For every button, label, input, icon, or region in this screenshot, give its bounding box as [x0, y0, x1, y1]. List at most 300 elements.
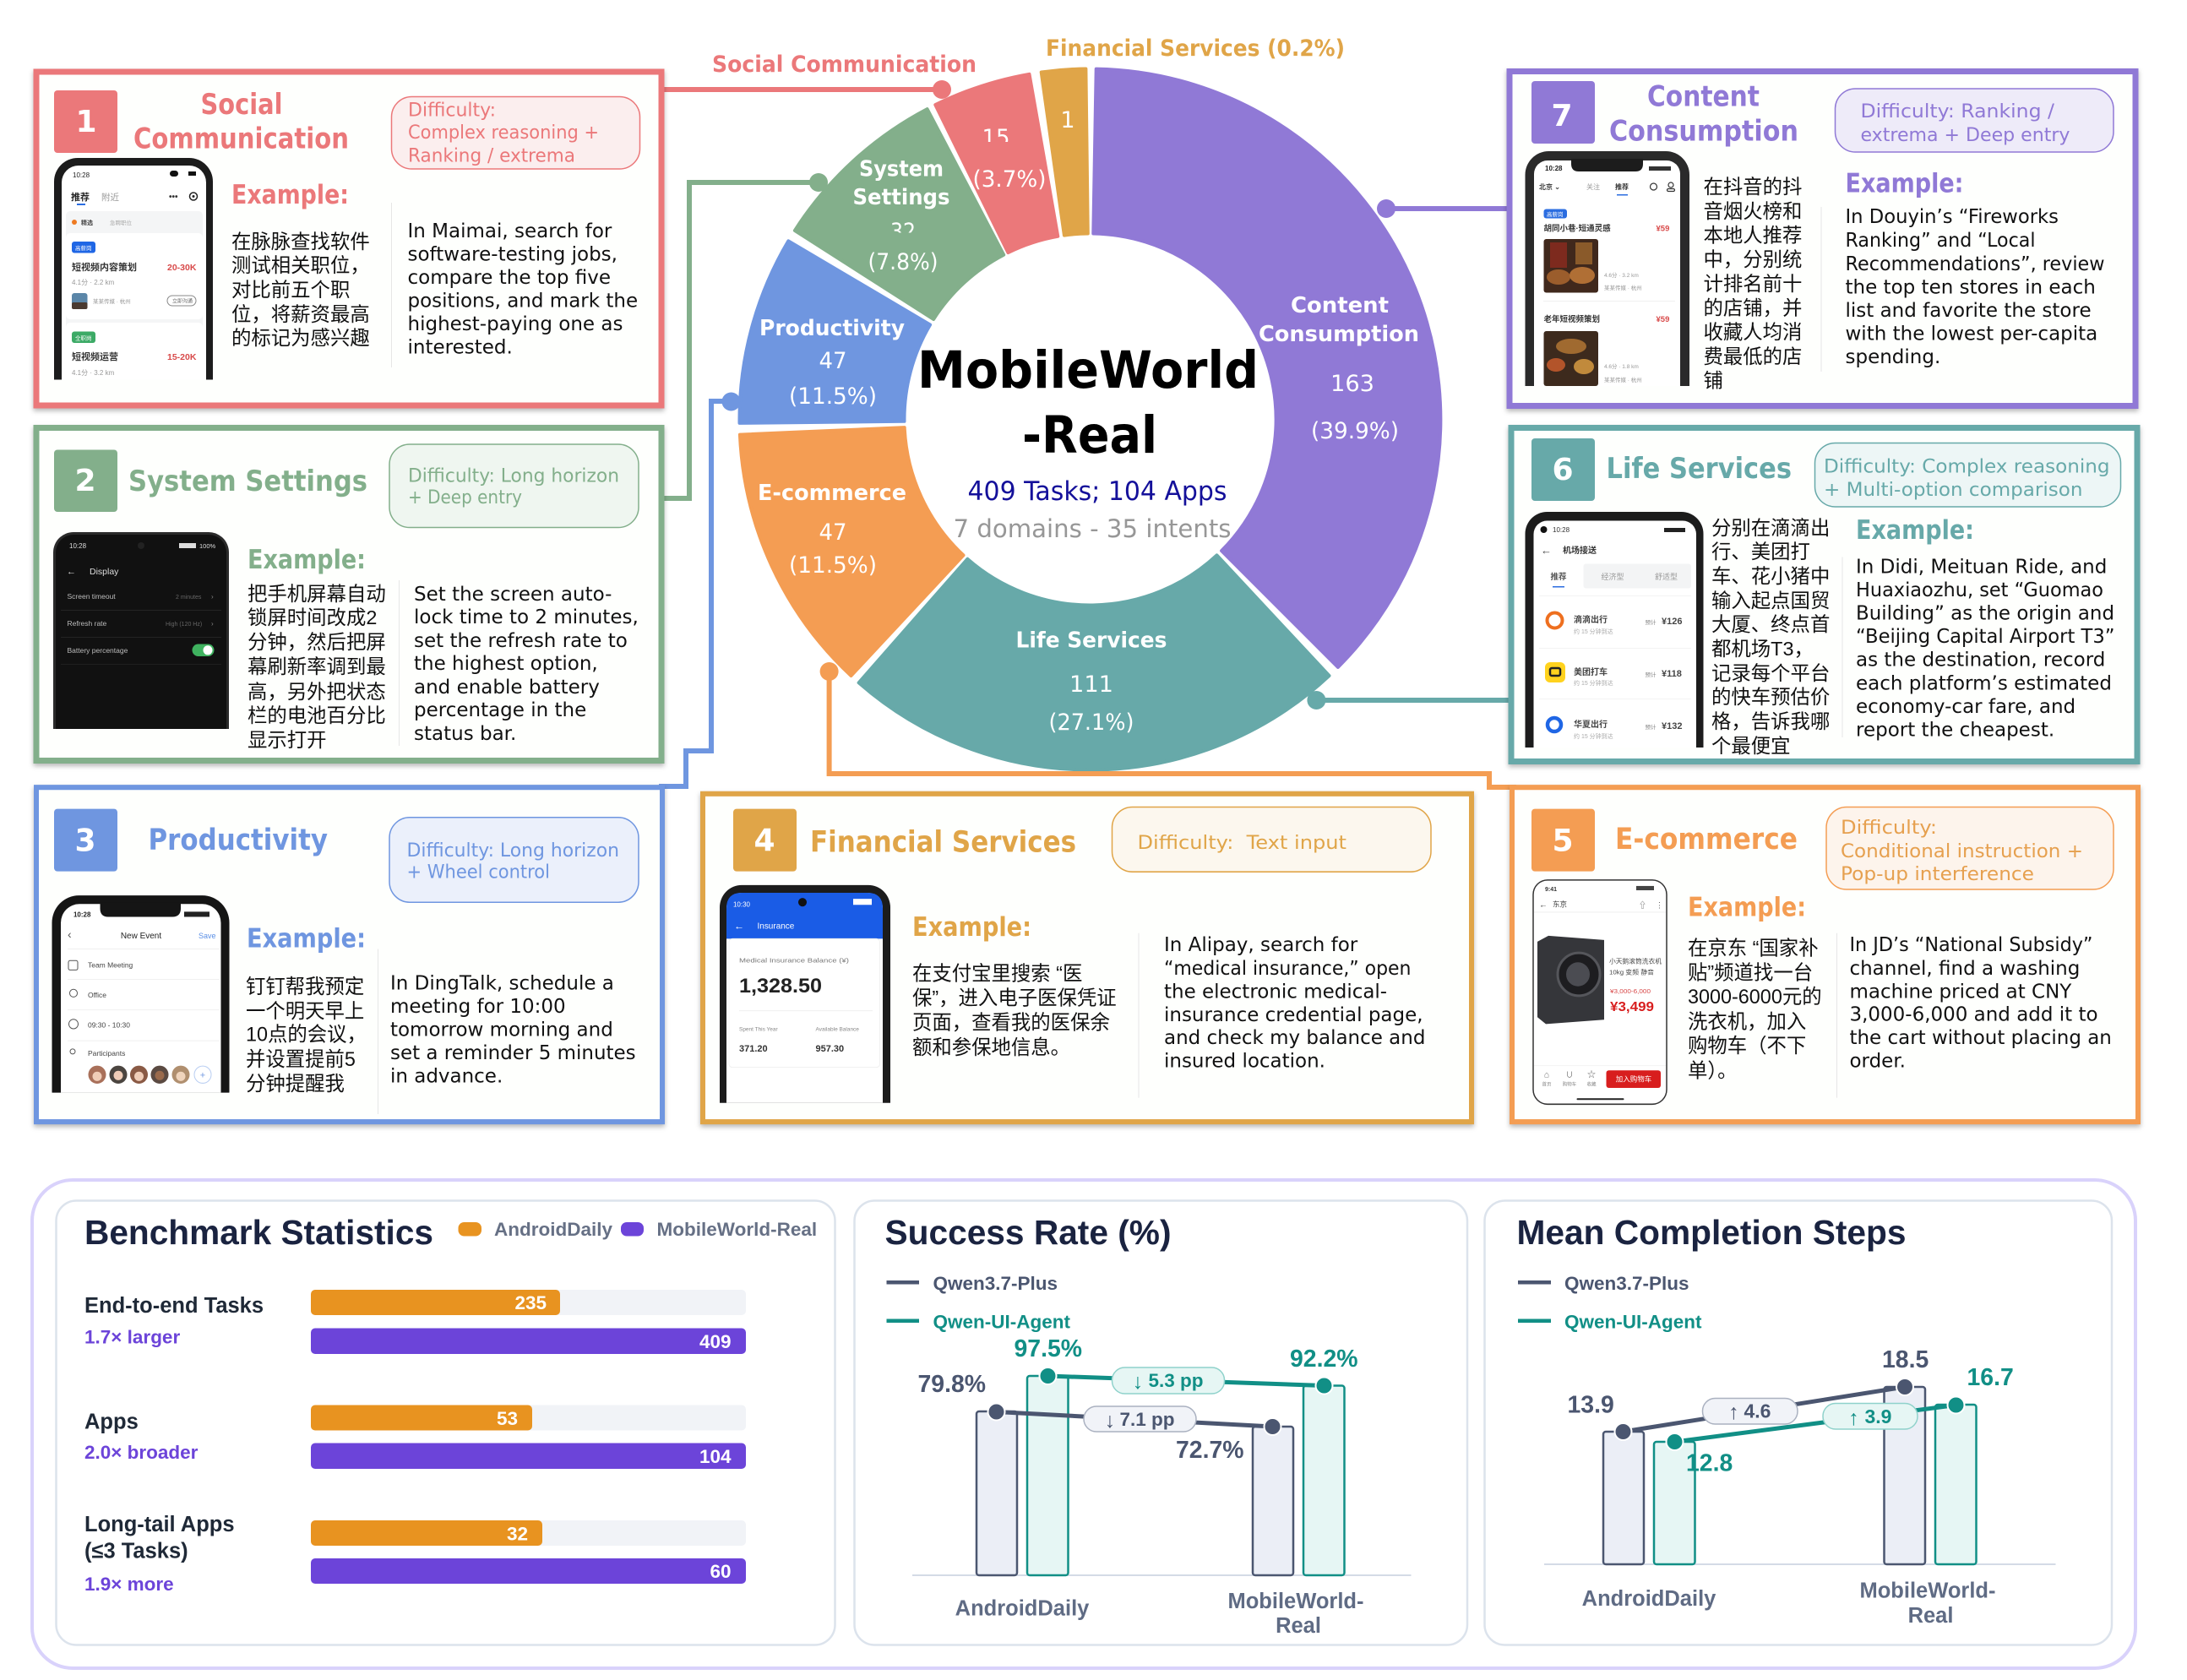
outer label: financial services: Financial Services (0.2%) — [1046, 35, 1345, 62]
number badge 3: 3 — [74, 822, 96, 858]
phone screenshot: display settings: 2 minutes — [176, 595, 202, 601]
phone screenshot: washing machine: ¥3,000-6,000 — [1610, 989, 1651, 995]
phone screenshot: insurance: 10:30 — [733, 900, 751, 908]
center title — [917, 340, 1259, 543]
english task text — [1856, 556, 2115, 742]
phone screenshot: Maimai: ••• — [169, 193, 178, 202]
heading: Productivity — [149, 824, 328, 857]
difficulty pill — [1835, 89, 2114, 152]
phone screenshot: food ranking: 高薪岗 — [1547, 210, 1563, 218]
english task text: meeting for 10:00 — [390, 995, 566, 1018]
metric: end-to-end tasks: 1.7× larger — [84, 1326, 180, 1348]
phone screenshot: washing machine: ← — [1539, 900, 1548, 910]
difficulty pill: + Deep entry — [408, 487, 522, 508]
chinese task text: 行、美团打 — [1711, 541, 1810, 563]
phone screenshot: ride hailing: 约 15 分钟到达 — [1574, 732, 1613, 740]
panel: system settings — [36, 427, 661, 760]
label: financial services: 1 — [1060, 107, 1075, 133]
connector: system settings — [659, 173, 828, 498]
phone screenshot: washing machine: 加入购物车 — [1616, 1074, 1652, 1083]
difficulty pill — [1814, 443, 2120, 507]
chinese task text: 显示打开 — [248, 729, 327, 751]
phone screenshot: Maimai: 高薪岗 — [75, 244, 91, 252]
segment: productivity — [739, 241, 930, 423]
connector: e-commerce — [820, 662, 1516, 787]
metric: apps: 104 — [699, 1446, 732, 1467]
category labels: Real — [1908, 1604, 1953, 1628]
phone screenshot: washing machine: ☆ — [1587, 1069, 1596, 1079]
phone screenshot: ride hailing: 预计 — [1646, 671, 1657, 678]
segment: e-commerce — [740, 427, 963, 676]
phone screenshot: Maimai: 4.1分 · 2.2 km — [72, 279, 115, 286]
phone screenshot: Maimai: 精选 — [81, 219, 93, 226]
phone screenshot: new event: ‹ — [68, 927, 72, 941]
chinese task text: 输入起点国贸 — [1711, 590, 1830, 612]
outer label: social communication: Social Communication — [712, 52, 977, 78]
legend: MobileWorld-Real — [657, 1219, 817, 1240]
chinese task text: 在抖音的抖 — [1703, 176, 1802, 198]
legend — [887, 1273, 1070, 1333]
phone screenshot: Maimai: 某某传媒 · 杭州 — [93, 297, 131, 305]
delta pill: qwen3.7-plus — [1084, 1406, 1196, 1433]
panel: benchmark frame — [32, 1180, 2135, 1668]
phone screenshot: food ranking: ¥59 — [1656, 315, 1669, 324]
chinese task text: 把手机屏幕自动 — [248, 583, 386, 605]
phone screenshot: Maimai: 全职岗 — [75, 334, 91, 341]
delta pill: qwen-ui-agent: ↓ — [1133, 1370, 1143, 1394]
phone screenshot: washing machine: ⇧ — [1639, 900, 1646, 909]
legend — [1518, 1273, 1702, 1333]
phone screenshot: washing machine: 9:41 — [1545, 887, 1557, 893]
phone screenshot: washing machine: 10kg 变频 静音 — [1609, 968, 1654, 976]
label: productivity — [759, 316, 905, 410]
english task text: software-testing jobs, — [407, 243, 617, 265]
phone screenshot: ride hailing: 滴滴出行 — [1574, 614, 1608, 625]
difficulty pill — [389, 444, 639, 527]
phone screenshot: food ranking: 关注 — [1586, 182, 1600, 191]
metric: apps: Apps — [84, 1411, 139, 1434]
card title: Mean Completion Steps — [1517, 1213, 1906, 1252]
phone screenshot: new event: New Event — [121, 932, 161, 941]
chinese task text: 单）。 — [1688, 1059, 1737, 1081]
phone screenshot: Maimai: 短视频内容策划 — [72, 261, 137, 273]
chinese task text: 分钟提醒我 — [246, 1073, 345, 1095]
phone screenshot: insurance: 371.20 — [739, 1044, 768, 1054]
english task text: In DingTalk, schedule a — [390, 971, 614, 994]
center title: 409 Tasks; 104 Apps — [968, 476, 1227, 507]
category labels: MobileWorld- — [1859, 1579, 1996, 1603]
heading: System Settings — [128, 465, 367, 498]
heading — [1609, 79, 1798, 149]
legend: Qwen-UI-Agent — [933, 1311, 1070, 1333]
connector: life services — [1307, 691, 1512, 710]
phone screenshot: ride hailing: ¥132 — [1662, 721, 1682, 731]
number badge 5: 5 — [1552, 822, 1574, 858]
metric: long-tail apps: (≤3 Tasks) — [84, 1539, 188, 1563]
phone screenshot: food ranking: 老年短视频策划 — [1544, 314, 1600, 324]
center title: MobileWorld — [917, 340, 1259, 400]
chinese task text: 本地人推荐 — [1703, 225, 1802, 247]
difficulty pill: Difficulty: Ranking / — [1860, 101, 2055, 122]
chinese task text: 3000-6000元的 — [1688, 986, 1822, 1008]
difficulty pill: + Wheel control — [407, 861, 550, 883]
phone screenshot: new event: 09:30 - 10:30 — [88, 1020, 130, 1029]
number badge 4 — [733, 809, 797, 872]
english task text: insured location. — [1164, 1049, 1325, 1073]
chinese task text: 锁屏时间改成2 — [248, 606, 377, 628]
chinese task text: 分别在滴滴出 — [1711, 517, 1830, 539]
metric: end-to-end tasks: 235 — [514, 1292, 547, 1313]
delta pill: qwen3.7-plus: 7.1 pp — [1120, 1409, 1175, 1430]
center title: 7 domains - 35 intents — [953, 514, 1232, 543]
phone screenshot: display settings — [53, 532, 229, 729]
english task text — [1850, 933, 2112, 1073]
english task text: Set the screen auto- — [414, 584, 612, 606]
phone screenshot: washing machine: 收藏 — [1587, 1080, 1597, 1087]
chinese task text: 幕刷新率调到最 — [248, 655, 386, 677]
phone screenshot: insurance: 1,328.50 — [739, 975, 822, 998]
card: benchmark statistics — [56, 1201, 835, 1645]
phone screenshot: new event: 10:28 — [73, 911, 91, 918]
english task text: Ranking” and “Local — [1845, 230, 2036, 252]
english task text: In Douyin’s “Fireworks — [1845, 206, 2059, 228]
panel: life services — [1511, 427, 2137, 782]
metric: long-tail apps: 1.9× more — [84, 1574, 174, 1595]
phone screenshot: ride hailing: 约 15 分钟到达 — [1574, 628, 1613, 635]
phone screenshot: insurance: Insurance — [757, 922, 795, 932]
chinese task text: 购物车（不下 — [1688, 1035, 1806, 1057]
card title: Success Rate (%) — [885, 1213, 1171, 1252]
phone screenshot: washing machine: 小天鹅滚筒洗衣机 — [1609, 957, 1662, 965]
value labels: 16.7 — [1967, 1364, 2014, 1391]
label: e-commerce: E-commerce — [758, 481, 906, 506]
english task text: status bar. — [414, 723, 516, 745]
english task text: positions, and mark the — [407, 291, 638, 313]
chinese task text: 车、花小猪中 — [1711, 565, 1830, 587]
difficulty pill: Difficulty: Long horizon — [408, 466, 619, 487]
phone screenshot: ride hailing: 预计 — [1646, 618, 1657, 626]
number badge 7: 7 — [1551, 99, 1573, 133]
english task text: the cart without placing an — [1850, 1026, 2112, 1049]
delta pill: qwen-ui-agent — [1112, 1367, 1225, 1394]
phone screenshot: new event: Participants — [88, 1049, 125, 1057]
legend — [458, 1219, 817, 1240]
legend: Qwen-UI-Agent — [1564, 1311, 1702, 1333]
heading: Life Services — [1607, 452, 1792, 486]
difficulty pill: Difficulty: Complex reasoning — [1824, 456, 2110, 478]
heading: Social — [201, 88, 282, 122]
metric: end-to-end tasks: 409 — [699, 1331, 732, 1352]
donut chart — [739, 69, 1440, 769]
metric: apps: 53 — [497, 1408, 518, 1429]
phone screenshot: insurance: ← — [734, 921, 744, 932]
number badge 7 — [1531, 81, 1595, 144]
english task text: insurance credential page, — [1164, 1003, 1423, 1026]
difficulty pill: Complex reasoning + — [408, 122, 599, 144]
phone screenshot: Maimai: 10:28 — [73, 171, 90, 179]
card: mean completion steps — [1485, 1201, 2112, 1645]
example heading: Example: — [248, 545, 366, 575]
chinese task text: 都机场T3， — [1711, 638, 1814, 660]
chinese task text: 位，将薪资最高 — [231, 303, 370, 325]
english task text: channel, find a washing — [1850, 957, 2080, 980]
english task text: In JD’s “National Subsidy” — [1850, 933, 2092, 956]
phone screenshot: display settings: › — [211, 593, 214, 601]
phone screenshot: insurance: Medical Insurance Balance (¥) — [739, 956, 850, 964]
difficulty pill: Difficulty: — [408, 100, 496, 122]
phone screenshot: ride hailing: 10:28 — [1553, 526, 1570, 534]
category labels — [1582, 1579, 1996, 1628]
english task text: spending. — [1845, 346, 1940, 368]
heading: Communication — [133, 122, 349, 155]
donut labels — [758, 107, 1419, 736]
phone screenshot: ride hailing: ¥118 — [1662, 669, 1682, 679]
difficulty pill: + Multi-option comparison — [1824, 480, 2083, 501]
label: e-commerce: 47 — [819, 519, 846, 546]
difficulty pill — [1112, 807, 1431, 872]
segment: system settings — [795, 109, 1004, 319]
english task text: the highest option, — [414, 653, 598, 675]
english task text — [1845, 206, 2105, 368]
label: productivity: 47 — [819, 348, 846, 374]
chinese task text: 在京东 “国家补 — [1688, 938, 1819, 960]
label: content consumption: Consumption — [1259, 322, 1419, 347]
example heading: Example: — [1688, 892, 1806, 923]
english task text: economy-car fare, and — [1856, 696, 2075, 718]
phone screenshot: display settings: ← — [67, 567, 76, 577]
delta pill: qwen3.7-plus: ↑ — [1728, 1400, 1739, 1424]
legend: Qwen3.7-Plus — [933, 1273, 1058, 1294]
label: social communication: 15 — [982, 125, 1010, 151]
label: e-commerce: (11.5%) — [789, 552, 877, 579]
heading: Content — [1647, 79, 1760, 113]
chinese task text: 在支付宝里搜索 “医 — [912, 962, 1082, 985]
label: productivity: Productivity — [759, 316, 905, 341]
number badge 4: 4 — [753, 822, 775, 858]
phone screenshot: ride hailing — [1526, 512, 1703, 748]
difficulty pill: Difficulty: Long horizon — [407, 840, 619, 862]
english task text: tomorrow morning and — [390, 1018, 613, 1041]
phone screenshot: ride hailing: 约 15 分钟到达 — [1574, 679, 1613, 687]
english task text: Building” as the origin and — [1856, 603, 2114, 625]
chinese task text: 一个明天早上 — [246, 1000, 364, 1022]
example heading: Example: — [247, 923, 366, 954]
english task text: and check my balance and — [1164, 1026, 1425, 1049]
heading: Financial Services — [810, 825, 1076, 859]
phone screenshot: Maimai: 急聘职位 — [110, 219, 132, 226]
english task text: highest-paying one as — [407, 313, 623, 335]
delta pill: qwen-ui-agent: 3.9 — [1865, 1405, 1891, 1427]
label: social communication — [975, 128, 1044, 189]
chinese task text: 音烟火榜和 — [1703, 200, 1802, 222]
phone screenshot: ride hailing: 美团打车 — [1574, 666, 1608, 677]
english task text: “Beijing Capital Airport T3” — [1856, 626, 2115, 648]
english task text: In Didi, Meituan Ride, and — [1856, 556, 2107, 578]
phone screenshot: ride hailing: 华夏出行 — [1574, 719, 1608, 730]
phone screenshot: Maimai: 附近 — [101, 192, 119, 203]
panel: e-commerce — [1512, 787, 2138, 1122]
english task text: and enable battery — [414, 677, 600, 699]
chinese task text: 记录每个平台 — [1711, 662, 1830, 684]
phone screenshot: Maimai — [54, 158, 213, 380]
phone screenshot: washing machine: ¥3,499 — [1610, 1000, 1654, 1014]
phone screenshot: washing machine — [1533, 880, 1667, 1104]
english task text: Recommendations”, review — [1845, 253, 2105, 275]
difficulty pill: Conditional instruction + — [1841, 840, 2083, 862]
english task text: lock time to 2 minutes, — [414, 606, 639, 628]
phone screenshot: ride hailing: 预计 — [1646, 723, 1657, 731]
phone screenshot: ride hailing: ¥126 — [1662, 617, 1682, 627]
english task text: order. — [1850, 1049, 1906, 1073]
segment: life services — [859, 555, 1330, 769]
number badge 3 — [54, 809, 117, 872]
category labels: Real — [1276, 1614, 1321, 1638]
example heading: Example: — [1845, 169, 1963, 199]
chinese task text: 大厦、终点首 — [1711, 613, 1830, 635]
chinese task text: 10点的会议， — [246, 1024, 367, 1046]
chinese task text: 个最便宜 — [1711, 735, 1791, 757]
delta pill: qwen3.7-plus — [1703, 1399, 1798, 1424]
label: social communication: (3.7%) — [973, 166, 1046, 193]
panel: content consumption — [1510, 71, 2135, 422]
category labels: AndroidDaily — [955, 1596, 1090, 1620]
delta pill: qwen3.7-plus: 4.6 — [1744, 1400, 1771, 1422]
chinese task text: 铺 — [1703, 370, 1723, 392]
label: life services: (27.1%) — [1049, 710, 1134, 736]
label: system settings: System — [859, 157, 944, 182]
english task text: as the destination, record — [1856, 649, 2105, 671]
heading: E-commerce — [1615, 823, 1798, 856]
english task text: each platform’s estimated — [1856, 672, 2112, 694]
number badge 1 — [54, 90, 117, 153]
chinese task text: 收藏人均消 — [1703, 321, 1802, 343]
number badge 2 — [54, 449, 117, 512]
chinese task text: 贴”频道找一台 — [1688, 961, 1813, 984]
english task text: machine priced at CNY — [1850, 980, 2072, 1003]
chinese task text: 的店铺，并 — [1703, 297, 1802, 319]
phone screenshot: ride hailing: ← — [1541, 544, 1552, 557]
metric: long-tail apps: Long-tail Apps — [84, 1513, 235, 1536]
english task text: set the refresh rate to — [414, 630, 628, 652]
english task text: the top ten stores in each — [1845, 277, 2096, 299]
connector: content consumption — [1377, 199, 1512, 218]
english task text: In Alipay, search for — [1164, 933, 1358, 956]
segment: social communication — [935, 74, 1058, 253]
legend: AndroidDaily — [494, 1219, 612, 1240]
number badge 2: 2 — [74, 464, 96, 498]
phone screenshot: new event: Office — [88, 991, 106, 999]
phone screenshot: ride hailing: 经济型 — [1601, 572, 1624, 581]
chinese task text: 在脉脉查找软件 — [231, 231, 370, 253]
phone screenshot: new event: Save — [199, 932, 215, 940]
label: content consumption: 163 — [1330, 371, 1374, 397]
english task text: Huaxiaozhu, set “Guomao — [1856, 579, 2103, 601]
connector: productivity — [659, 392, 740, 786]
phone screenshot: ride hailing: 舒适型 — [1655, 572, 1678, 581]
category labels: MobileWorld- — [1227, 1590, 1364, 1613]
difficulty pill — [392, 96, 640, 169]
chinese task text: 测试相关职位， — [231, 254, 370, 276]
metric: apps — [84, 1405, 746, 1469]
value labels: 97.5% — [1014, 1335, 1082, 1362]
label: content consumption: (39.9%) — [1311, 418, 1399, 444]
chinese task text: 对比前五个职 — [231, 279, 350, 301]
value labels: 18.5 — [1882, 1346, 1929, 1373]
phone screenshot: display settings: 10:28 — [69, 542, 87, 550]
chinese task text: 栏的电池百分比 — [248, 704, 386, 726]
metric: end-to-end tasks — [84, 1290, 746, 1354]
phone screenshot: display settings: 100% — [199, 542, 216, 550]
phone screenshot: food ranking: 某某传媒 · 杭州 — [1604, 376, 1642, 383]
value labels: 12.8 — [1686, 1449, 1733, 1476]
phone screenshot: food ranking: 4.6分 · 3.2 km — [1604, 271, 1639, 279]
value labels: 92.2% — [1290, 1346, 1358, 1373]
bars: success rate — [977, 1376, 1345, 1575]
phone screenshot: display settings: Display — [90, 567, 119, 577]
phone screenshot: washing machine: 购物车 — [1563, 1080, 1577, 1087]
english task text: 3,000-6,000 and add it to — [1850, 1003, 2098, 1025]
phone screenshot: ride hailing: 机场接送 — [1563, 545, 1597, 556]
difficulty pill: Ranking / extrema — [408, 145, 575, 167]
chinese task text: 并设置提前5 — [246, 1048, 356, 1070]
label: life services: 111 — [1069, 671, 1113, 698]
phone screenshot: Maimai: 15-20K — [167, 352, 197, 362]
chinese task text: 高，另外把状态 — [248, 681, 386, 703]
phone screenshot: food ranking: 4.6分 · 1.8 km — [1604, 362, 1639, 370]
phone screenshot: display settings: High (120 Hz) — [166, 622, 202, 628]
delta pill: qwen3.7-plus: ↓ — [1105, 1409, 1115, 1433]
chinese task text: 额和参保地信息。 — [912, 1036, 1070, 1058]
english task text: “medical insurance,” open — [1164, 957, 1411, 980]
phone screenshot: insurance: 957.30 — [816, 1044, 844, 1054]
example heading: Example: — [1856, 515, 1974, 546]
legend: Qwen3.7-Plus — [1564, 1273, 1689, 1294]
phone screenshot: food ranking: ¥59 — [1656, 225, 1669, 233]
metric: long-tail apps: 32 — [507, 1524, 528, 1544]
delta pill: qwen-ui-agent: 5.3 pp — [1149, 1370, 1204, 1391]
category labels: AndroidDaily — [1582, 1587, 1716, 1611]
difficulty pill — [389, 818, 639, 902]
heading — [133, 88, 349, 155]
phone screenshot: display settings: › — [211, 620, 214, 628]
phone screenshot: new event: + — [200, 1070, 205, 1080]
difficulty pill: Difficulty: — [1841, 817, 1937, 839]
value labels: 13.9 — [1568, 1392, 1614, 1419]
phone screenshot: insurance: Spent This Year — [739, 1026, 778, 1033]
phone screenshot: washing machine: 东京 — [1553, 899, 1567, 908]
phone screenshot: Maimai: 20-30K — [167, 263, 197, 273]
english task text: compare the top five — [407, 267, 611, 289]
panel: social communication — [36, 72, 661, 411]
chinese task text: 中，分别统 — [1703, 248, 1802, 270]
phone screenshot: food ranking: 推荐 — [1615, 182, 1629, 191]
difficulty pill: Difficulty: Text input — [1137, 832, 1346, 854]
phone screenshot: food ranking: 10:28 — [1545, 165, 1563, 172]
number badge 6: 6 — [1552, 453, 1574, 487]
value labels — [917, 1335, 1358, 1464]
example heading: Example: — [912, 912, 1031, 943]
phone screenshot: new event — [52, 895, 230, 1093]
english task text: list and favorite the store — [1845, 300, 2092, 322]
number badge 1: 1 — [75, 105, 97, 139]
panel: financial services — [703, 794, 1472, 1134]
label: content consumption: Content — [1291, 293, 1389, 318]
phone screenshot: insurance: Available Balance — [816, 1026, 859, 1033]
segment: financial services — [1042, 69, 1088, 236]
phone screenshot: food ranking — [1526, 151, 1689, 386]
phone screenshot: food ranking: 胡同小巷·短通灵感 — [1544, 223, 1611, 233]
difficulty pill: Pop-up interference — [1841, 863, 2034, 885]
